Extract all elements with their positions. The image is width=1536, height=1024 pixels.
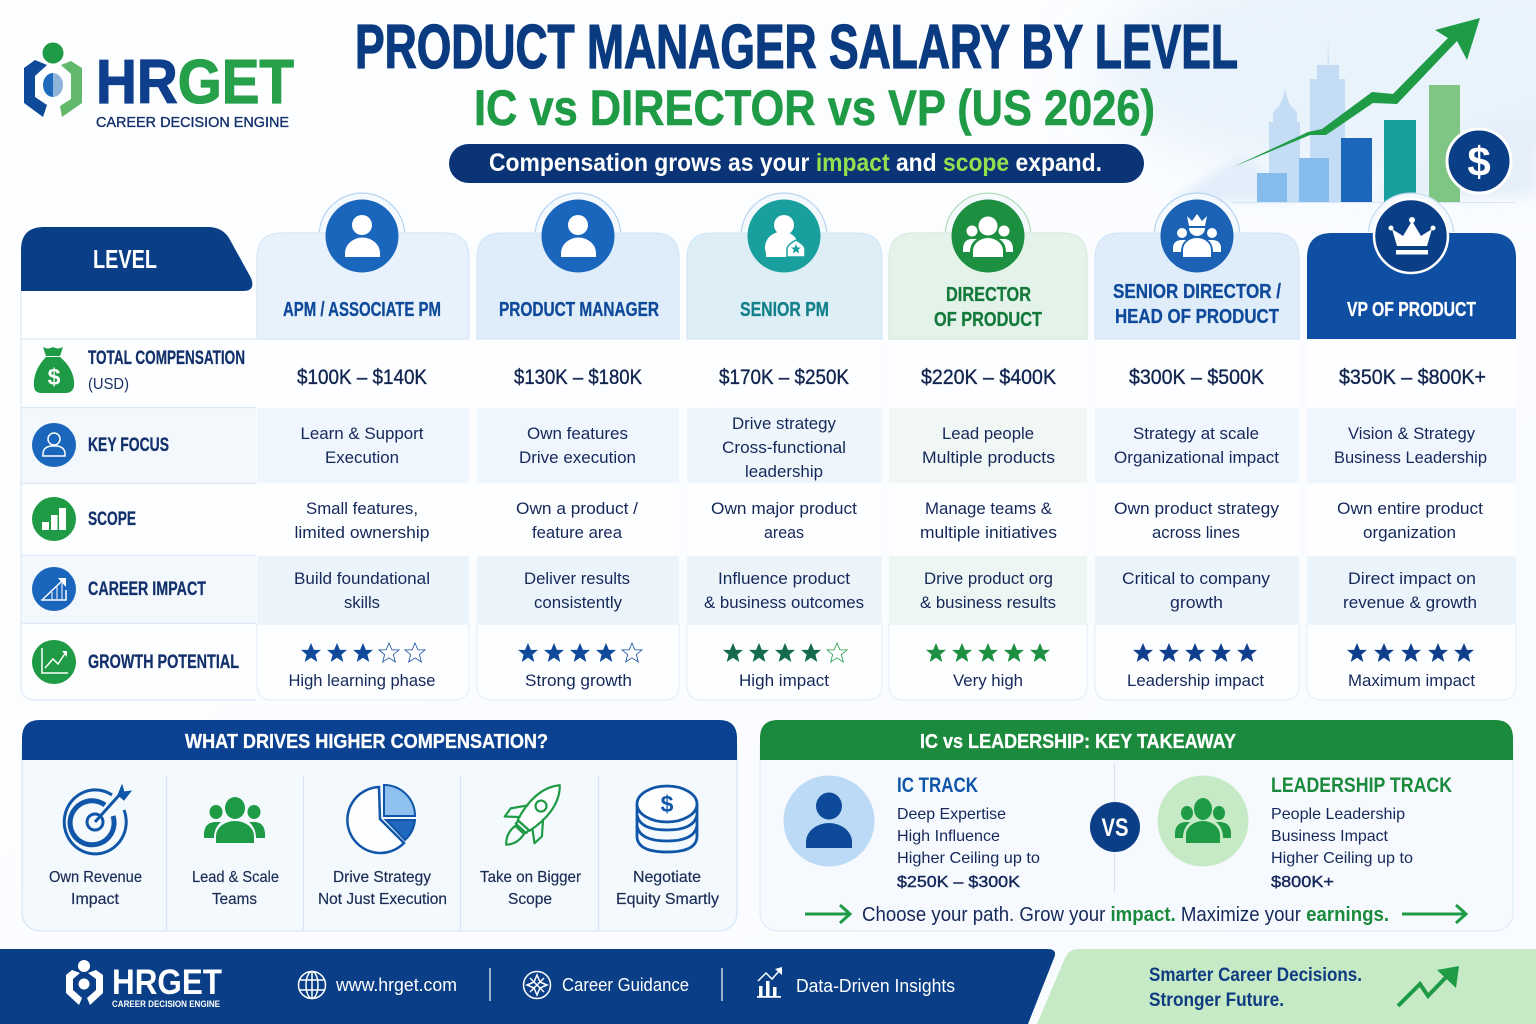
growth potential: [518, 643, 642, 690]
driver: take on bigger scope: Scope: [508, 891, 552, 908]
driver: take on bigger scope: [480, 771, 582, 908]
scope: organization: [1363, 523, 1456, 542]
growth bars: [1257, 173, 1287, 202]
level name: [1113, 281, 1281, 328]
arrow: left: [805, 905, 850, 923]
IC track: [784, 774, 1040, 891]
header card: [477, 233, 679, 339]
arrow: [1233, 18, 1480, 167]
IC track: Higher Ceiling up to: [897, 850, 1040, 867]
scope: [1337, 499, 1483, 542]
icon: dollar coin: $: [1467, 138, 1491, 185]
icon: rocket: [491, 771, 575, 859]
data-driven insights: Data-Driven Insights: [796, 976, 955, 996]
career impact: & business outcomes: [704, 593, 864, 612]
tagline pill: [449, 144, 1144, 183]
row label: scope: SCOPE: [88, 509, 136, 530]
column: row labels: [21, 227, 256, 700]
career impact: [920, 569, 1056, 612]
header card: [687, 233, 882, 339]
level tab: LEVEL: [93, 244, 157, 274]
icon: HRGET hexagon person: [24, 42, 82, 117]
footer logo: CAREER DECISION ENGINE: [112, 999, 220, 1009]
career impact: Build foundational: [294, 569, 430, 588]
scope: Own entire product: [1337, 499, 1483, 518]
closing message: Choose your path. Grow your impact. Maximize your earnings.: [862, 904, 1389, 926]
key focus: Organizational impact: [1114, 448, 1279, 467]
VS badge: VS: [1102, 814, 1128, 842]
career impact: [1343, 569, 1477, 612]
scope: [294, 499, 430, 542]
panel header: WHAT DRIVES HIGHER COMPENSATION?: [185, 731, 548, 753]
scope: [711, 499, 857, 542]
career impact: & business results: [920, 593, 1056, 612]
key focus: [1334, 424, 1487, 467]
header card: [889, 233, 1087, 339]
level name: PRODUCT MANAGER: [499, 299, 659, 321]
driver: own revenue impact: [49, 785, 142, 908]
career impact: [524, 569, 630, 612]
career impact: Influence product: [718, 569, 850, 588]
level tab: [21, 227, 252, 291]
compensation: $300K – $500K: [1129, 366, 1264, 389]
key focus: Drive execution: [519, 448, 636, 467]
driver: own revenue impact: Own Revenue: [49, 869, 142, 886]
logo: HRGET: [24, 42, 294, 131]
key focus: [300, 424, 424, 467]
career impact: skills: [344, 593, 380, 612]
career impact: [294, 569, 430, 612]
illustration: skyline, growth bars, arrow and dollar coin: [1170, 18, 1536, 202]
growth potential: Very high: [953, 671, 1023, 690]
career impact: Deliver results: [524, 569, 630, 588]
driver: lead and scale teams: Lead & Scale: [192, 869, 279, 886]
level name: SENIOR DIRECTOR /: [1113, 281, 1281, 303]
skyline: [1170, 40, 1536, 202]
icon: person: [535, 193, 621, 272]
key focus: Strategy at scale: [1133, 424, 1259, 443]
footer callout: Stronger Future.: [1149, 990, 1284, 1011]
driver: take on bigger scope: Take on Bigger: [480, 869, 582, 886]
level name: OF PRODUCT: [934, 309, 1042, 331]
driver: drive strategy: [318, 785, 447, 908]
icon: leadership team: [1158, 776, 1248, 866]
leadership track: [1158, 774, 1452, 891]
driver: own revenue impact: Impact: [71, 891, 120, 908]
key focus: Cross-functional: [722, 438, 846, 457]
footer callout: [1037, 949, 1536, 1024]
panel: what drives higher compensation: [22, 720, 737, 931]
icon: growth arrow: [1398, 966, 1459, 1006]
career guidance: Career Guidance: [562, 975, 689, 995]
leadership track: LEADERSHIP TRACK: [1271, 774, 1452, 797]
growth potential: High learning phase: [288, 671, 436, 690]
icon: team: [204, 797, 265, 843]
tagline pill: Compensation grows as your impact and scope expand.: [489, 149, 1102, 177]
footer band: [0, 949, 1055, 1024]
row label: total compensation: (USD): [88, 376, 129, 393]
icon: coin stack: $: [661, 791, 674, 817]
key focus: Business Leadership: [1334, 448, 1487, 467]
icon: team: [945, 193, 1031, 272]
level name: APM / ASSOCIATE PM: [283, 299, 441, 321]
growth potential: [723, 643, 847, 690]
icon: crown: [1368, 193, 1454, 273]
scope: across lines: [1152, 523, 1240, 542]
career impact: [704, 569, 864, 612]
IC track: $250K – $300K: [897, 874, 1020, 891]
compensation: $220K – $400K: [921, 366, 1056, 389]
column: Senior PM: [687, 193, 882, 700]
career guidance: [524, 972, 689, 998]
VS badge: [1090, 802, 1140, 852]
key focus: leadership: [745, 462, 823, 481]
row label: growth potential: [32, 640, 239, 684]
growth potential: High impact: [739, 671, 829, 690]
key focus: Vision & Strategy: [1348, 424, 1475, 443]
header card: [1307, 233, 1516, 339]
scope: Small features,: [306, 499, 418, 518]
growth potential: Maximum impact: [1348, 671, 1475, 690]
footer logo: HRGET: [112, 963, 222, 1002]
row label: scope: [32, 497, 136, 541]
arrow: right: [1402, 905, 1466, 923]
column: VP of Product: [1307, 193, 1516, 700]
career impact: consistently: [534, 593, 622, 612]
growth potential: Strong growth: [525, 671, 632, 690]
scope: [1114, 499, 1280, 542]
key focus: Execution: [325, 448, 399, 467]
scope: feature area: [532, 523, 623, 542]
leadership track: $800K+: [1271, 874, 1334, 891]
leadership track: People Leadership: [1271, 806, 1405, 823]
comparison table: [21, 193, 1516, 700]
level name: SENIOR PM: [740, 299, 829, 321]
icon: person: [319, 193, 405, 272]
scope: [516, 499, 638, 542]
key focus: Learn & Support: [300, 424, 424, 443]
key focus: [722, 414, 846, 481]
footer logo: [66, 960, 222, 1009]
panel header: [22, 720, 737, 760]
scope: areas: [764, 523, 804, 542]
website: [298, 972, 457, 998]
icon: pie chart: [347, 785, 415, 853]
row label: growth potential: GROWTH POTENTIAL: [88, 652, 239, 673]
scope: Own a product /: [516, 499, 638, 518]
compensation: $350K – $800K+: [1339, 366, 1486, 389]
data-driven insights: [757, 967, 955, 998]
driver: drive strategy: Drive Strategy: [333, 869, 431, 886]
driver: drive strategy: Not Just Execution: [318, 891, 447, 908]
leadership track: Higher Ceiling up to: [1271, 850, 1413, 867]
compensation: $170K – $250K: [719, 366, 849, 389]
level name: [934, 284, 1042, 331]
icon: crowned team: [1154, 193, 1240, 272]
panel header: [760, 720, 1513, 760]
growth potential: [288, 643, 436, 690]
row label: total compensation: [34, 347, 245, 393]
driver: lead and scale teams: Teams: [212, 891, 257, 908]
key focus: [1114, 424, 1279, 467]
row label: key focus: [32, 423, 169, 467]
icon: individual contributor: [784, 776, 874, 866]
scope: Own product strategy: [1114, 499, 1280, 518]
scope: multiple initiatives: [920, 523, 1057, 542]
driver: negotiate equity smartly: [616, 786, 719, 908]
IC track: Deep Expertise: [897, 806, 1006, 823]
driver: negotiate equity smartly: Negotiate: [633, 869, 701, 886]
key focus: [519, 424, 636, 467]
compensation: $100K – $140K: [297, 366, 427, 389]
growth potential: [1347, 643, 1475, 690]
key focus: Own features: [527, 424, 628, 443]
career impact: Critical to company: [1122, 569, 1270, 588]
footer callout: Smarter Career Decisions.: [1149, 965, 1362, 986]
icon: target: [64, 785, 131, 854]
icon: dollar coin: [1447, 129, 1511, 193]
panel header: IC vs LEADERSHIP: KEY TAKEAWAY: [920, 731, 1237, 753]
career impact: Drive product org: [924, 569, 1053, 588]
row label: total compensation: $: [48, 364, 61, 390]
growth potential: [1127, 643, 1264, 690]
leadership track: Business Impact: [1271, 828, 1389, 845]
key focus: Lead people: [942, 424, 1034, 443]
row label: total compensation: TOTAL COMPENSATION: [88, 348, 245, 369]
scope: Manage teams &: [925, 499, 1053, 518]
column: APM / Associate PM: [257, 193, 469, 700]
subtitle: IC vs DIRECTOR vs VP (US 2026): [474, 80, 1155, 136]
key focus: Multiple products: [922, 448, 1055, 467]
driver: negotiate equity smartly: Equity Smartly: [616, 891, 719, 908]
scope: limited ownership: [294, 523, 430, 542]
scope: [920, 499, 1057, 542]
wordmark: HRGET: [96, 48, 294, 117]
column: Senior Director / Head of Product: [1095, 193, 1299, 700]
row label: career impact: CAREER IMPACT: [88, 579, 206, 600]
driver: lead and scale teams: [192, 797, 279, 908]
IC track: High Influence: [897, 828, 1000, 845]
column: Director of Product: [889, 193, 1087, 700]
row label: key focus: KEY FOCUS: [88, 435, 169, 456]
website: www.hrget.com: [335, 975, 457, 995]
column: Product Manager: [477, 193, 679, 700]
key focus: Drive strategy: [732, 414, 836, 433]
career impact: growth: [1170, 593, 1223, 612]
level name: DIRECTOR: [946, 284, 1031, 306]
level name: HEAD OF PRODUCT: [1115, 306, 1279, 328]
growth potential: [926, 643, 1050, 690]
header card: [257, 233, 469, 339]
growth potential: Leadership impact: [1127, 671, 1264, 690]
panel: IC vs leadership key takeaway: [760, 720, 1513, 931]
key focus: [922, 424, 1055, 467]
compensation: $130K – $180K: [514, 366, 642, 389]
career impact: [1122, 569, 1270, 612]
level name: VP OF PRODUCT: [1347, 299, 1476, 321]
tagline: CAREER DECISION ENGINE: [96, 114, 289, 131]
icon: person with star badge: [741, 193, 827, 272]
row label: career impact: [32, 567, 206, 611]
header card: [1095, 233, 1299, 339]
scope: Own major product: [711, 499, 857, 518]
IC track: IC TRACK: [897, 774, 978, 797]
career impact: Direct impact on: [1348, 569, 1476, 588]
career impact: revenue & growth: [1343, 593, 1477, 612]
